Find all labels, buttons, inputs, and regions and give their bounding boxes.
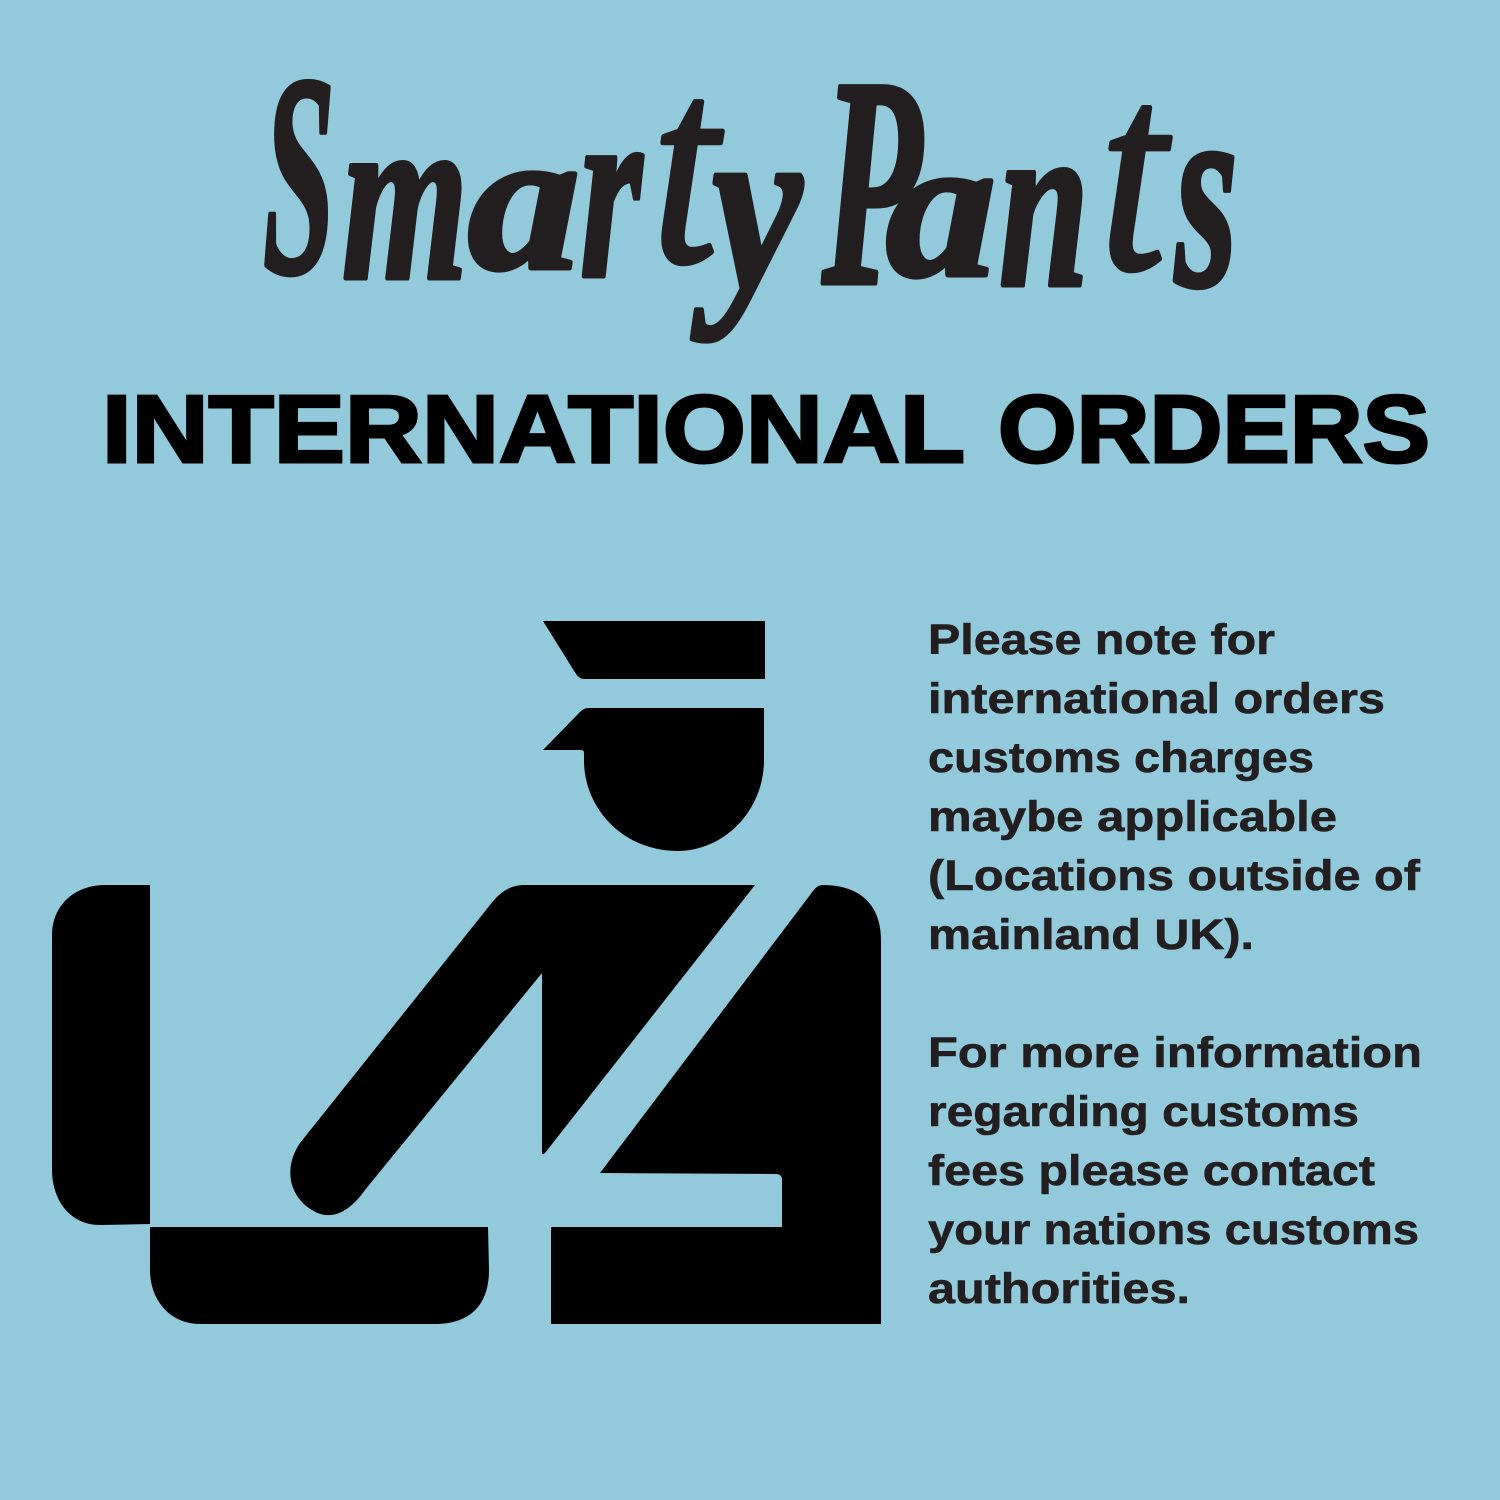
title: SmartyPants logo xyxy=(263,10,1238,348)
title: SmartyPants logo: y xyxy=(691,70,803,342)
text block: customs information: Please note for xyxy=(928,616,1275,664)
title: SmartyPants logo: s xyxy=(1172,35,1238,346)
title: SmartyPants logo: r xyxy=(580,46,645,332)
icon part: traveller body xyxy=(52,885,150,1225)
text block: customs information: your nations customs xyxy=(928,1206,1419,1254)
text block: customs information: customs charges xyxy=(928,734,1314,782)
icon part: officer shoulder and desk xyxy=(551,885,881,1324)
title: SmartyPants logo: a xyxy=(886,95,996,319)
title: SmartyPants logo: m xyxy=(342,60,468,331)
text block: customs information: For more information xyxy=(928,1029,1422,1077)
heading: international orders xyxy=(102,376,1430,483)
title: SmartyPants logo: n xyxy=(999,67,1089,338)
icon part: officer hat xyxy=(543,621,765,679)
icon part: officer head xyxy=(543,708,764,851)
text block: customs information: authorities. xyxy=(928,1265,1190,1313)
heading: international orders: ORDERS xyxy=(998,376,1430,483)
heading: international orders: INTERNATIONAL xyxy=(102,376,965,483)
title: SmartyPants logo: S xyxy=(263,16,335,335)
text block: customs information: regarding customs xyxy=(928,1088,1359,1136)
title: SmartyPants logo: t xyxy=(652,10,726,323)
text block: customs information: (Locations outside of xyxy=(928,852,1421,900)
text block: customs information xyxy=(928,616,1422,1313)
icon: customs officer at desk xyxy=(52,621,881,1324)
title: SmartyPants logo: P xyxy=(819,16,924,348)
title: SmartyPants logo: t xyxy=(1100,14,1174,330)
text block: customs information: fees please contact xyxy=(928,1147,1375,1195)
text block: customs information: international orders xyxy=(928,675,1385,723)
text block: customs information: mainland UK). xyxy=(928,911,1254,959)
icon part: officer arm and torso xyxy=(290,885,755,1215)
text block: customs information: maybe applicable xyxy=(928,793,1337,841)
icon part: suitcase xyxy=(150,1227,489,1324)
title: SmartyPants logo: a xyxy=(468,88,580,312)
